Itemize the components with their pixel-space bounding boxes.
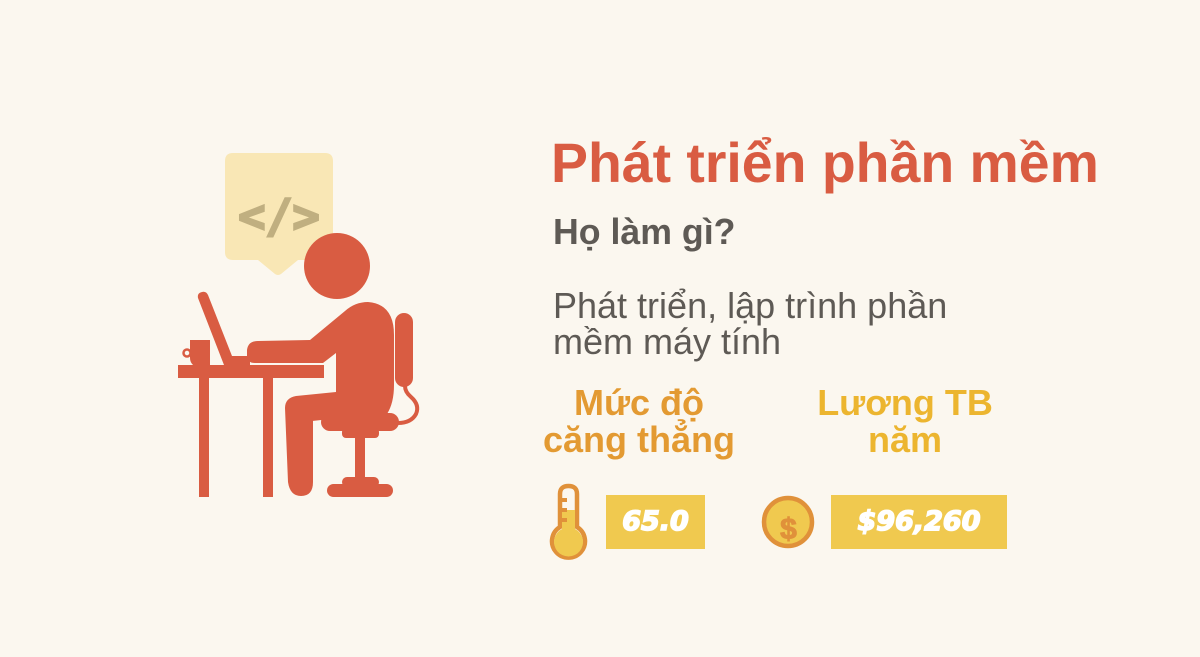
icon: dollar coin <box>762 496 814 548</box>
icon: speech bubble with code: </> <box>238 189 320 243</box>
icon: person at desk <box>178 233 417 497</box>
title: Phát triển phần mềm <box>551 132 1099 194</box>
subheading: Họ làm gì? <box>553 212 735 252</box>
description <box>553 285 947 362</box>
salary value <box>831 495 1007 549</box>
icon: dollar coin: $ <box>780 513 797 546</box>
stress label: Mức độ <box>574 382 704 423</box>
stress value: 65.0 <box>622 506 689 537</box>
stress label <box>543 382 735 460</box>
icon: thermometer <box>550 484 588 560</box>
description: mềm máy tính <box>553 321 781 362</box>
salary value: $96,260 <box>858 506 980 537</box>
description: Phát triển, lập trình phần <box>553 285 947 326</box>
salary label <box>817 382 993 460</box>
illustration: developer at desk <box>178 153 420 497</box>
salary label: năm <box>868 419 942 460</box>
icon: speech bubble with code <box>225 153 333 275</box>
salary label: Lương TB <box>817 382 993 423</box>
stress label: căng thẳng <box>543 419 735 460</box>
stress value <box>606 495 705 549</box>
